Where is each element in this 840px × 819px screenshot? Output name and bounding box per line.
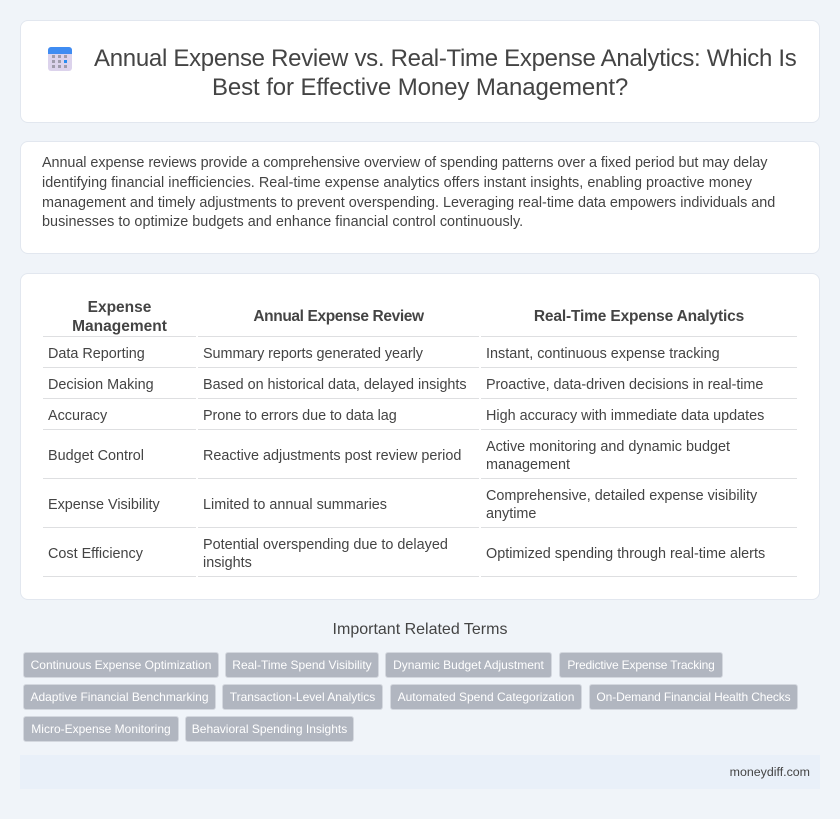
row: accuracy	[48, 408, 764, 424]
row: decision making: Decision Making	[48, 377, 154, 393]
row: data reporting	[48, 346, 720, 362]
row: decision making: Based on historical data, delayed insights	[203, 377, 467, 393]
row: cost efficiency: Potential overspending due to delayed	[203, 537, 448, 553]
row: accuracy: Accuracy	[48, 408, 107, 424]
text block: introduction: Annual expense reviews provide a comprehensive overview of spending patterns over a fixed period but may delay	[42, 155, 767, 171]
row: cost efficiency: Cost Efficiency	[48, 546, 143, 562]
table header: Annual Expense Review	[253, 308, 424, 325]
row: decision making: Proactive, data-driven decisions in real-time	[486, 377, 763, 393]
row: budget control	[48, 439, 730, 473]
row: expense visibility: Limited to annual summaries	[203, 497, 387, 513]
row: cost efficiency: insights	[203, 555, 252, 571]
row: budget control: Budget Control	[48, 448, 144, 464]
footer	[20, 755, 820, 789]
row: cost efficiency	[48, 537, 765, 571]
text block: introduction	[42, 155, 775, 230]
row: cost efficiency: Optimized spending through real-time alerts	[486, 546, 765, 562]
row: expense visibility: anytime	[486, 506, 536, 522]
tags: related terms: On-Demand Financial Health Checks	[596, 690, 791, 704]
row: expense visibility: Expense Visibility	[48, 497, 160, 513]
row: accuracy: Prone to errors due to data lag	[203, 408, 397, 424]
row: data reporting: Instant, continuous expense tracking	[486, 346, 720, 362]
tags: related terms: Adaptive Financial Benchmarking	[30, 690, 209, 704]
tags: related terms: Behavioral Spending Insights	[192, 722, 347, 736]
table header: Real-Time Expense Analytics	[534, 308, 744, 325]
panel: comparison table	[20, 273, 820, 600]
text block: introduction: businesses to optimize budgets and enhance financial control continuously.	[42, 214, 523, 230]
row: accuracy: High accuracy with immediate data updates	[486, 408, 764, 424]
text block: introduction: management and timely adjustments to prevent overspending. Leveraging real-time data empowers individuals and	[42, 195, 775, 211]
tags: related terms: Real-Time Spend Visibility	[232, 658, 372, 672]
tags: related terms: Predictive Expense Tracking	[567, 658, 715, 672]
tags: related terms: Automated Spend Categorization	[398, 690, 574, 704]
tags: related terms: Dynamic Budget Adjustment	[393, 658, 544, 672]
row: budget control: management	[486, 457, 570, 473]
row: data reporting: Summary reports generated yearly	[203, 346, 423, 362]
tags: related terms: Micro-Expense Monitoring	[31, 722, 171, 736]
title	[94, 45, 796, 101]
icon: calendar	[48, 47, 72, 71]
heading: related terms: Important Related Terms	[333, 621, 507, 638]
row: expense visibility: Comprehensive, detailed expense visibility	[486, 488, 757, 504]
table header: Expense	[88, 299, 151, 316]
text block: introduction: identifying financial inefficiencies. Real-time expense analytics offers instant insights, enabling proactive money	[42, 175, 752, 191]
tags: related terms: Continuous Expense Optimization	[31, 658, 211, 672]
panel: introduction	[20, 141, 820, 254]
tags: related terms	[23, 652, 798, 742]
title: Annual Expense Review vs. Real-Time Expense Analytics: Which Is	[94, 45, 796, 72]
title: Best for Effective Money Management?	[212, 74, 628, 101]
tags: related terms: Transaction-Level Analytics	[230, 690, 375, 704]
row: expense visibility	[48, 488, 758, 522]
table header	[72, 299, 744, 335]
table header: Management	[72, 318, 167, 335]
row: decision making	[48, 377, 763, 393]
row: data reporting: Data Reporting	[48, 346, 145, 362]
row: budget control: Active monitoring and dynamic budget	[486, 439, 730, 455]
panel: title card	[20, 20, 820, 123]
footer: source: moneydiff.com	[730, 765, 810, 779]
row: budget control: Reactive adjustments post review period	[203, 448, 461, 464]
